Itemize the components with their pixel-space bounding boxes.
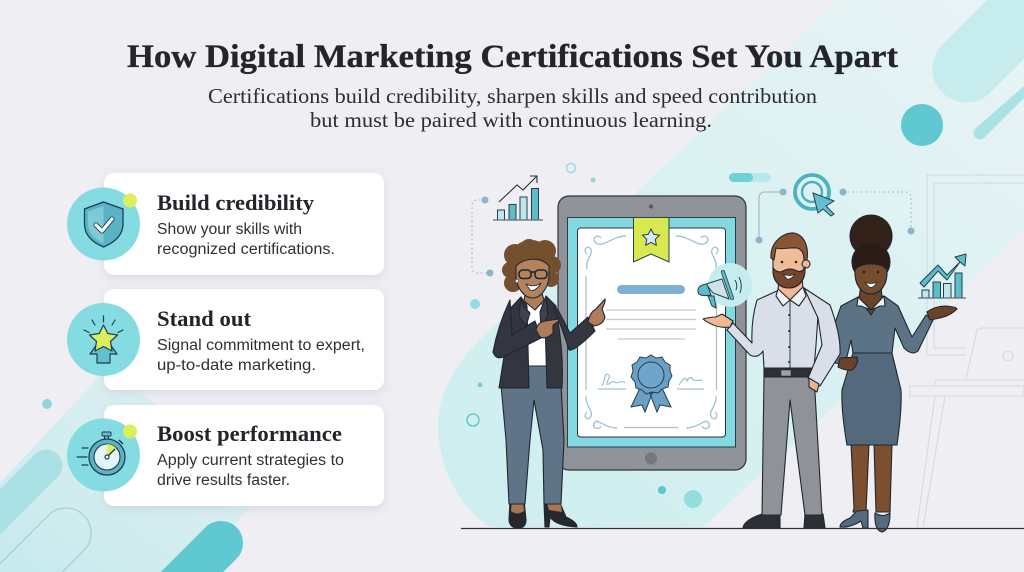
neck xyxy=(778,278,803,300)
floor line xyxy=(461,528,1024,530)
certificate heading bar xyxy=(617,285,685,294)
certificate text lines xyxy=(606,310,696,339)
neck xyxy=(524,290,544,310)
open hand xyxy=(703,314,733,327)
subtitle: but must be paired with continuous learning. xyxy=(310,108,712,132)
text: stand out description: up-to-date marketing. xyxy=(157,357,316,374)
tablet with certificate xyxy=(558,196,746,470)
heading: stand out: Stand out xyxy=(157,306,252,331)
title: How Digital Marketing Certifications Set You Apart xyxy=(127,39,898,75)
text: build credibility description: recognized certifications. xyxy=(157,241,335,258)
woman left xyxy=(493,239,605,528)
belt xyxy=(764,368,814,377)
connector: solid top xyxy=(756,188,786,244)
panel: stand out xyxy=(67,289,384,390)
status pill xyxy=(729,173,771,182)
text: boost performance description xyxy=(157,452,344,489)
panel: boost performance xyxy=(67,405,384,506)
text: stand out description: Signal commitment to expert, xyxy=(157,337,365,354)
beard xyxy=(773,267,805,288)
connector: dotted top xyxy=(840,188,914,234)
shoes xyxy=(743,514,825,528)
shirt xyxy=(526,304,547,366)
subtitle: Certifications build credibility, sharpen skills and speed contribution xyxy=(208,84,818,108)
hand in pocket xyxy=(809,378,819,392)
smile xyxy=(865,282,877,287)
decorative dots and rings xyxy=(467,164,702,508)
ribbon bookmark xyxy=(634,218,669,262)
icon: shield xyxy=(84,202,123,247)
icon: megaphone xyxy=(698,263,752,308)
trousers xyxy=(762,375,822,515)
face xyxy=(855,264,887,294)
woman right xyxy=(830,215,957,532)
smile xyxy=(783,274,795,279)
shoes xyxy=(509,500,526,528)
collar xyxy=(857,296,885,310)
man xyxy=(703,233,840,528)
hair xyxy=(502,239,561,292)
shoes xyxy=(840,510,868,528)
certificate sheet xyxy=(578,228,726,437)
icon: small bar chart top left xyxy=(493,176,543,220)
hair xyxy=(852,243,890,281)
blouse and arms xyxy=(830,296,933,365)
icon: target with cursor xyxy=(795,175,834,216)
panel: build credibility xyxy=(67,173,384,275)
connector: dotted left xyxy=(472,196,494,276)
jacket arm right xyxy=(553,306,595,350)
text: build credibility description: Show your skills with xyxy=(157,221,302,238)
bun xyxy=(850,215,892,257)
collar xyxy=(776,287,806,306)
text: stand out description xyxy=(157,337,365,374)
icon: star with arrow xyxy=(84,316,123,363)
head xyxy=(773,248,805,288)
text: build credibility description xyxy=(157,221,335,258)
face xyxy=(516,259,549,298)
icon: growth chart on hand xyxy=(918,254,966,298)
background room sketch: window and desk xyxy=(910,175,1024,527)
open hand xyxy=(927,306,957,320)
neck xyxy=(859,285,882,315)
icon: stopwatch xyxy=(77,432,125,475)
tablet screen xyxy=(568,218,736,447)
glasses xyxy=(519,270,547,278)
heading: boost performance: Boost performance xyxy=(157,421,342,446)
text: boost performance description: Apply current strategies to xyxy=(157,452,344,469)
hands xyxy=(536,319,559,338)
text: boost performance description: drive results faster. xyxy=(157,472,290,489)
pants xyxy=(501,365,564,504)
jacket arm left xyxy=(493,300,541,358)
jacket body xyxy=(499,296,562,388)
seal xyxy=(631,355,672,412)
hair xyxy=(771,233,807,260)
heading: build credibility: Build credibility xyxy=(157,190,314,215)
smile xyxy=(526,283,541,290)
legs xyxy=(851,443,892,512)
signatures xyxy=(598,374,704,389)
hand on hip xyxy=(838,357,857,370)
subtitle xyxy=(208,84,818,132)
sleeve right xyxy=(804,288,840,386)
shirt xyxy=(727,288,818,368)
skirt xyxy=(842,353,901,445)
